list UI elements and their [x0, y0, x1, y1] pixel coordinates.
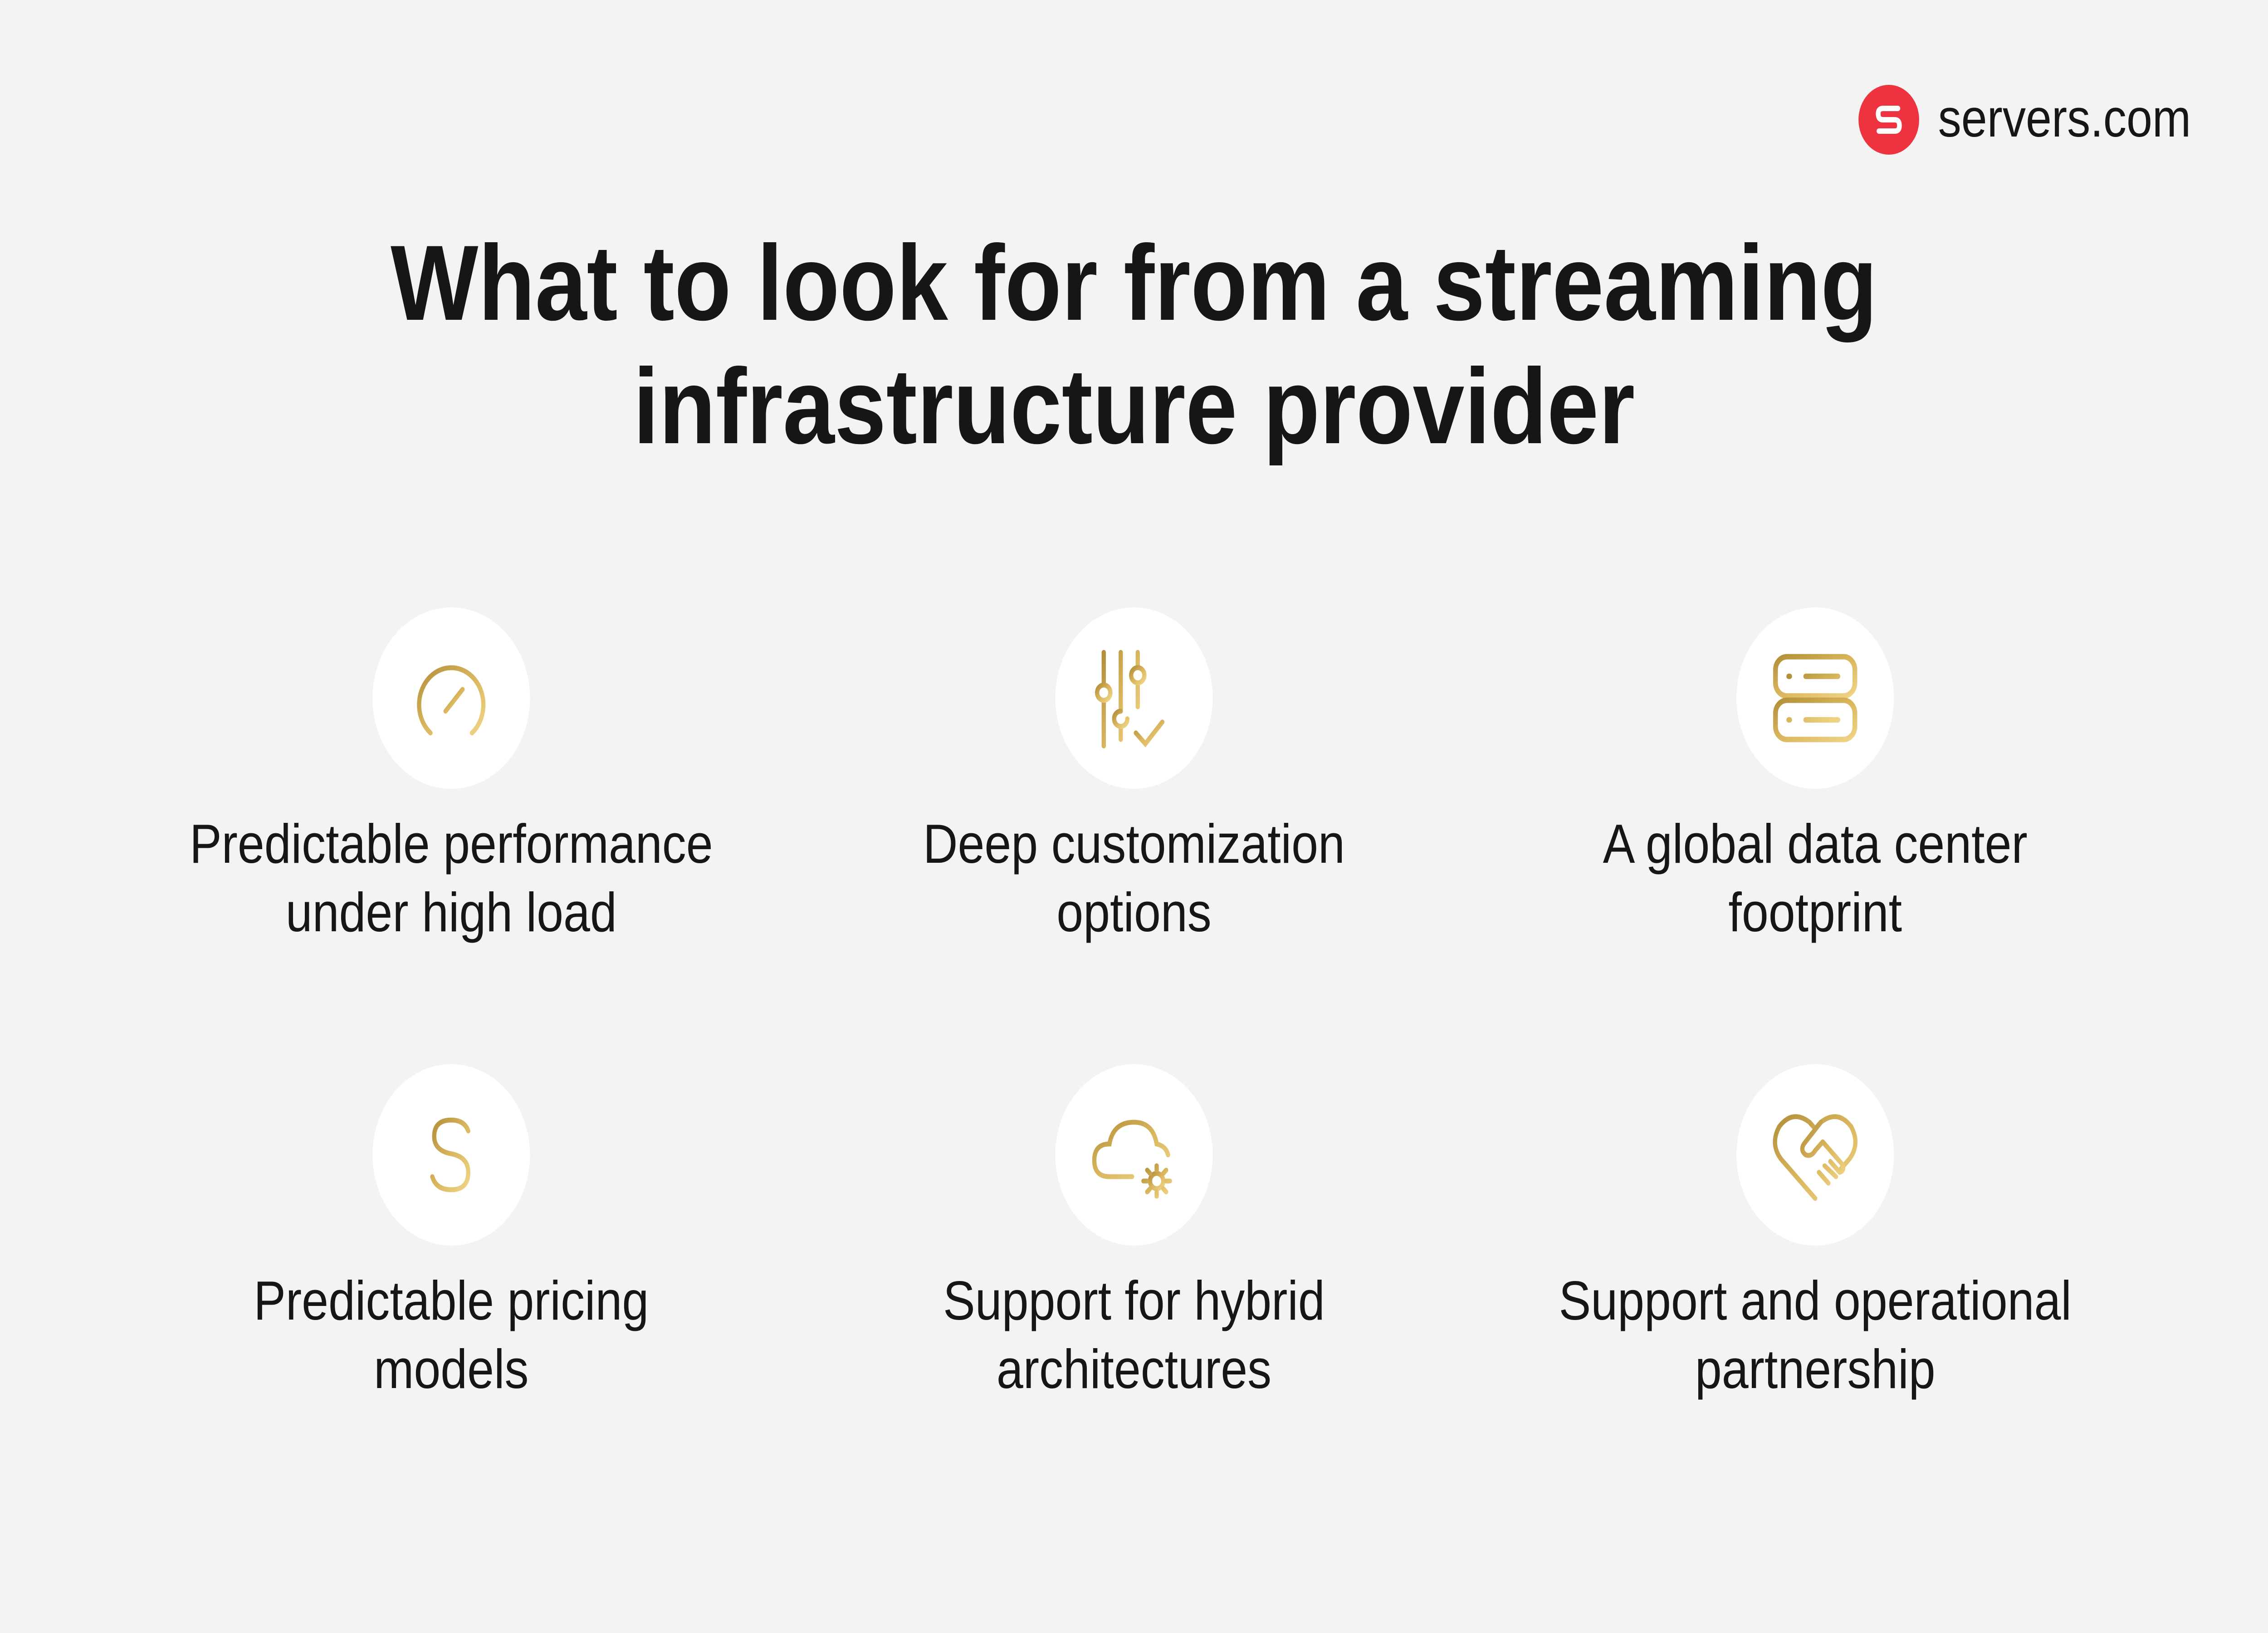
title: What to look for from a streaming [391, 223, 1877, 342]
logo text: servers.com [1938, 88, 2191, 148]
icon: server [1736, 607, 1894, 789]
label: Support for hybrid [943, 1270, 1325, 1332]
label: architectures [997, 1339, 1271, 1400]
icon: cloud gear [1055, 1064, 1213, 1246]
icon: heart handshake [1736, 1064, 1894, 1246]
label: Predictable pricing [254, 1270, 649, 1332]
title: infrastructure provider [633, 346, 1635, 466]
icon: speedometer [372, 607, 530, 789]
item 2: customization [923, 607, 1345, 944]
label: footprint [1728, 882, 1902, 944]
item 5: hybrid [943, 1064, 1325, 1400]
label: Predictable performance [190, 813, 713, 875]
item 4: pricing [254, 1064, 649, 1400]
label: under high load [286, 882, 617, 944]
label: partnership [1695, 1339, 1936, 1400]
icon: dollar [372, 1064, 530, 1246]
label: Deep customization [923, 813, 1345, 875]
label: Support and operational [1559, 1270, 2072, 1332]
icon: logo mark [1858, 85, 1919, 155]
label: options [1056, 882, 1212, 944]
label: models [374, 1339, 528, 1400]
item 6: partnership [1559, 1064, 2072, 1400]
item 1: performance [190, 607, 713, 944]
item 3: data center [1603, 607, 2028, 944]
logo [1858, 85, 2191, 155]
icon: sliders [1055, 607, 1213, 789]
label: A global data center [1603, 813, 2028, 875]
